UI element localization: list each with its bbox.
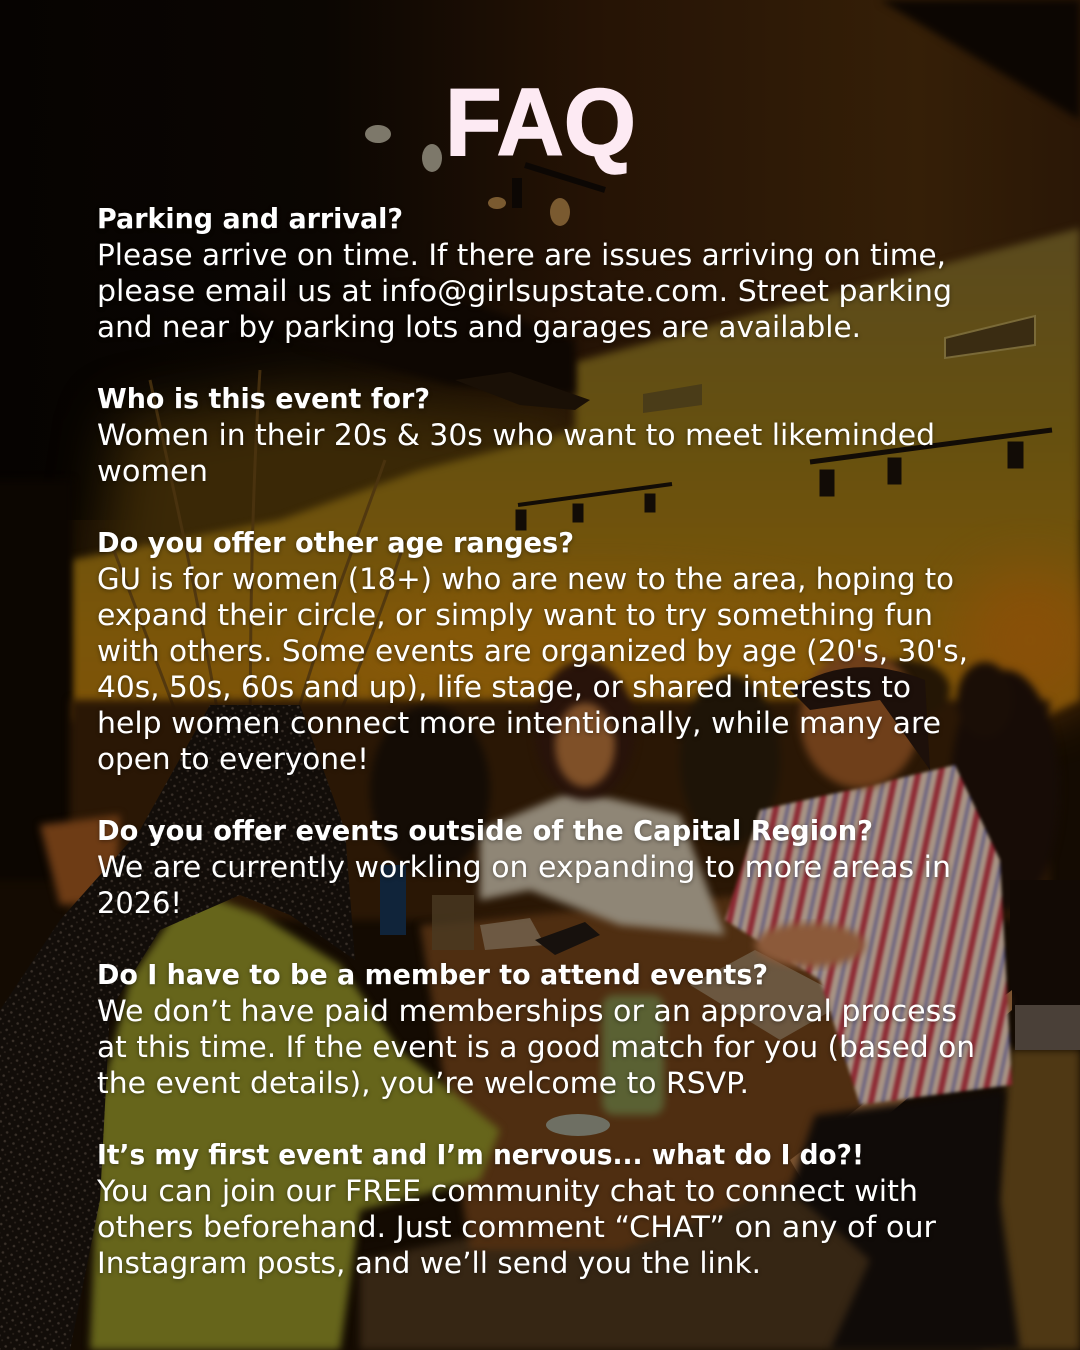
left wall behind branches [90,390,580,620]
faq: membership: Do I have to be a member to attend events? [97,958,768,991]
faq: other age ranges: open to everyone! [97,742,369,776]
faq: other age ranges: help women connect more intentionally, while many are [97,706,941,740]
ceiling [0,0,1080,520]
faq: events outside capital region [97,814,951,920]
faq: events outside capital region: 2026! [97,886,182,920]
faq: parking and arrival: and near by parking lots and garages are available. [97,310,861,344]
faq: parking and arrival: Please arrive on time. If there are issues arriving on time, [97,238,946,272]
wall vent centre [643,384,702,413]
faq: other age ranges: with others. Some events are organized by age (20's, 30's, [97,634,968,668]
center woman [480,660,725,935]
faq: who is this event for [97,382,935,488]
table [420,895,1012,1250]
floor right [980,1050,1080,1350]
faq: membership: at this time. If the event is a good match for you (based on [97,1030,975,1064]
dark soffit [235,285,575,395]
dark upper right corner [880,0,1080,120]
yellow wall [70,228,1080,760]
dark left column [0,480,72,880]
rug [360,1150,1000,1350]
faq: parking and arrival [97,202,952,344]
title: FAQ [445,69,636,176]
faq: other age ranges [97,526,968,776]
track lights centre [516,484,672,530]
black pants [790,1090,1020,1350]
green sweater [90,890,500,1350]
warm wall glow [300,590,900,730]
willow branches [110,370,405,820]
background people band [70,660,1060,920]
faq: parking and arrival: Parking and arrival? [97,202,403,235]
faq: who is this event for: Who is this event for? [97,382,430,415]
faq: events outside capital region: We are currently workling on expanding to more areas in [97,850,951,884]
dark right edge [1010,880,1080,1010]
faq: membership: the event details), you’re welcome to RSVP. [97,1066,749,1100]
terracotta pot [40,815,120,905]
faq: other age ranges: expand their circle, or simply want to try something fun [97,598,933,632]
faq: first event nerves [96,1138,936,1280]
faq: first event nerves: It’s my first event and I’m nervous... what do I do?! [97,1138,864,1171]
wall vent right [945,316,1035,358]
jar drink [602,995,664,1115]
faq: who is this event for: women [97,454,208,488]
faq: other age ranges: GU is for women (18+) who are new to the area, hoping to [97,562,954,596]
faq: who is this event for: Women in their 20s & 30s who want to meet likeminded [97,418,935,452]
faq: other age ranges: 40s, 50s, 60s and up), life stage, or shared interests to [97,670,911,704]
faq: membership: We don’t have paid memberships or an approval process [97,994,957,1028]
bottle, phone, wine glass, coaster [380,865,610,1136]
ceiling spotlights near title [365,125,605,226]
papers on table [690,950,850,1040]
faq: other age ranges: Do you offer other age ranges? [97,526,574,559]
right woman in striped shirt [725,652,1012,1105]
faq: parking and arrival: please email us at info@girlsupstate.com. Street parking [97,274,952,308]
braids [0,705,355,1350]
faq: first event nerves: others beforehand. Just comment “CHAT” on any of our [97,1210,936,1244]
faq: first event nerves: You can join our FREE community chat to connect with [96,1174,918,1208]
track lights right [810,430,1052,496]
faq: first event nerves: Instagram posts, and we’ll send you the link. [97,1246,761,1280]
faq: membership [97,958,975,1100]
ceiling beam [455,372,590,410]
faq: events outside capital region: Do you offer events outside of the Capital Region? [97,814,873,847]
